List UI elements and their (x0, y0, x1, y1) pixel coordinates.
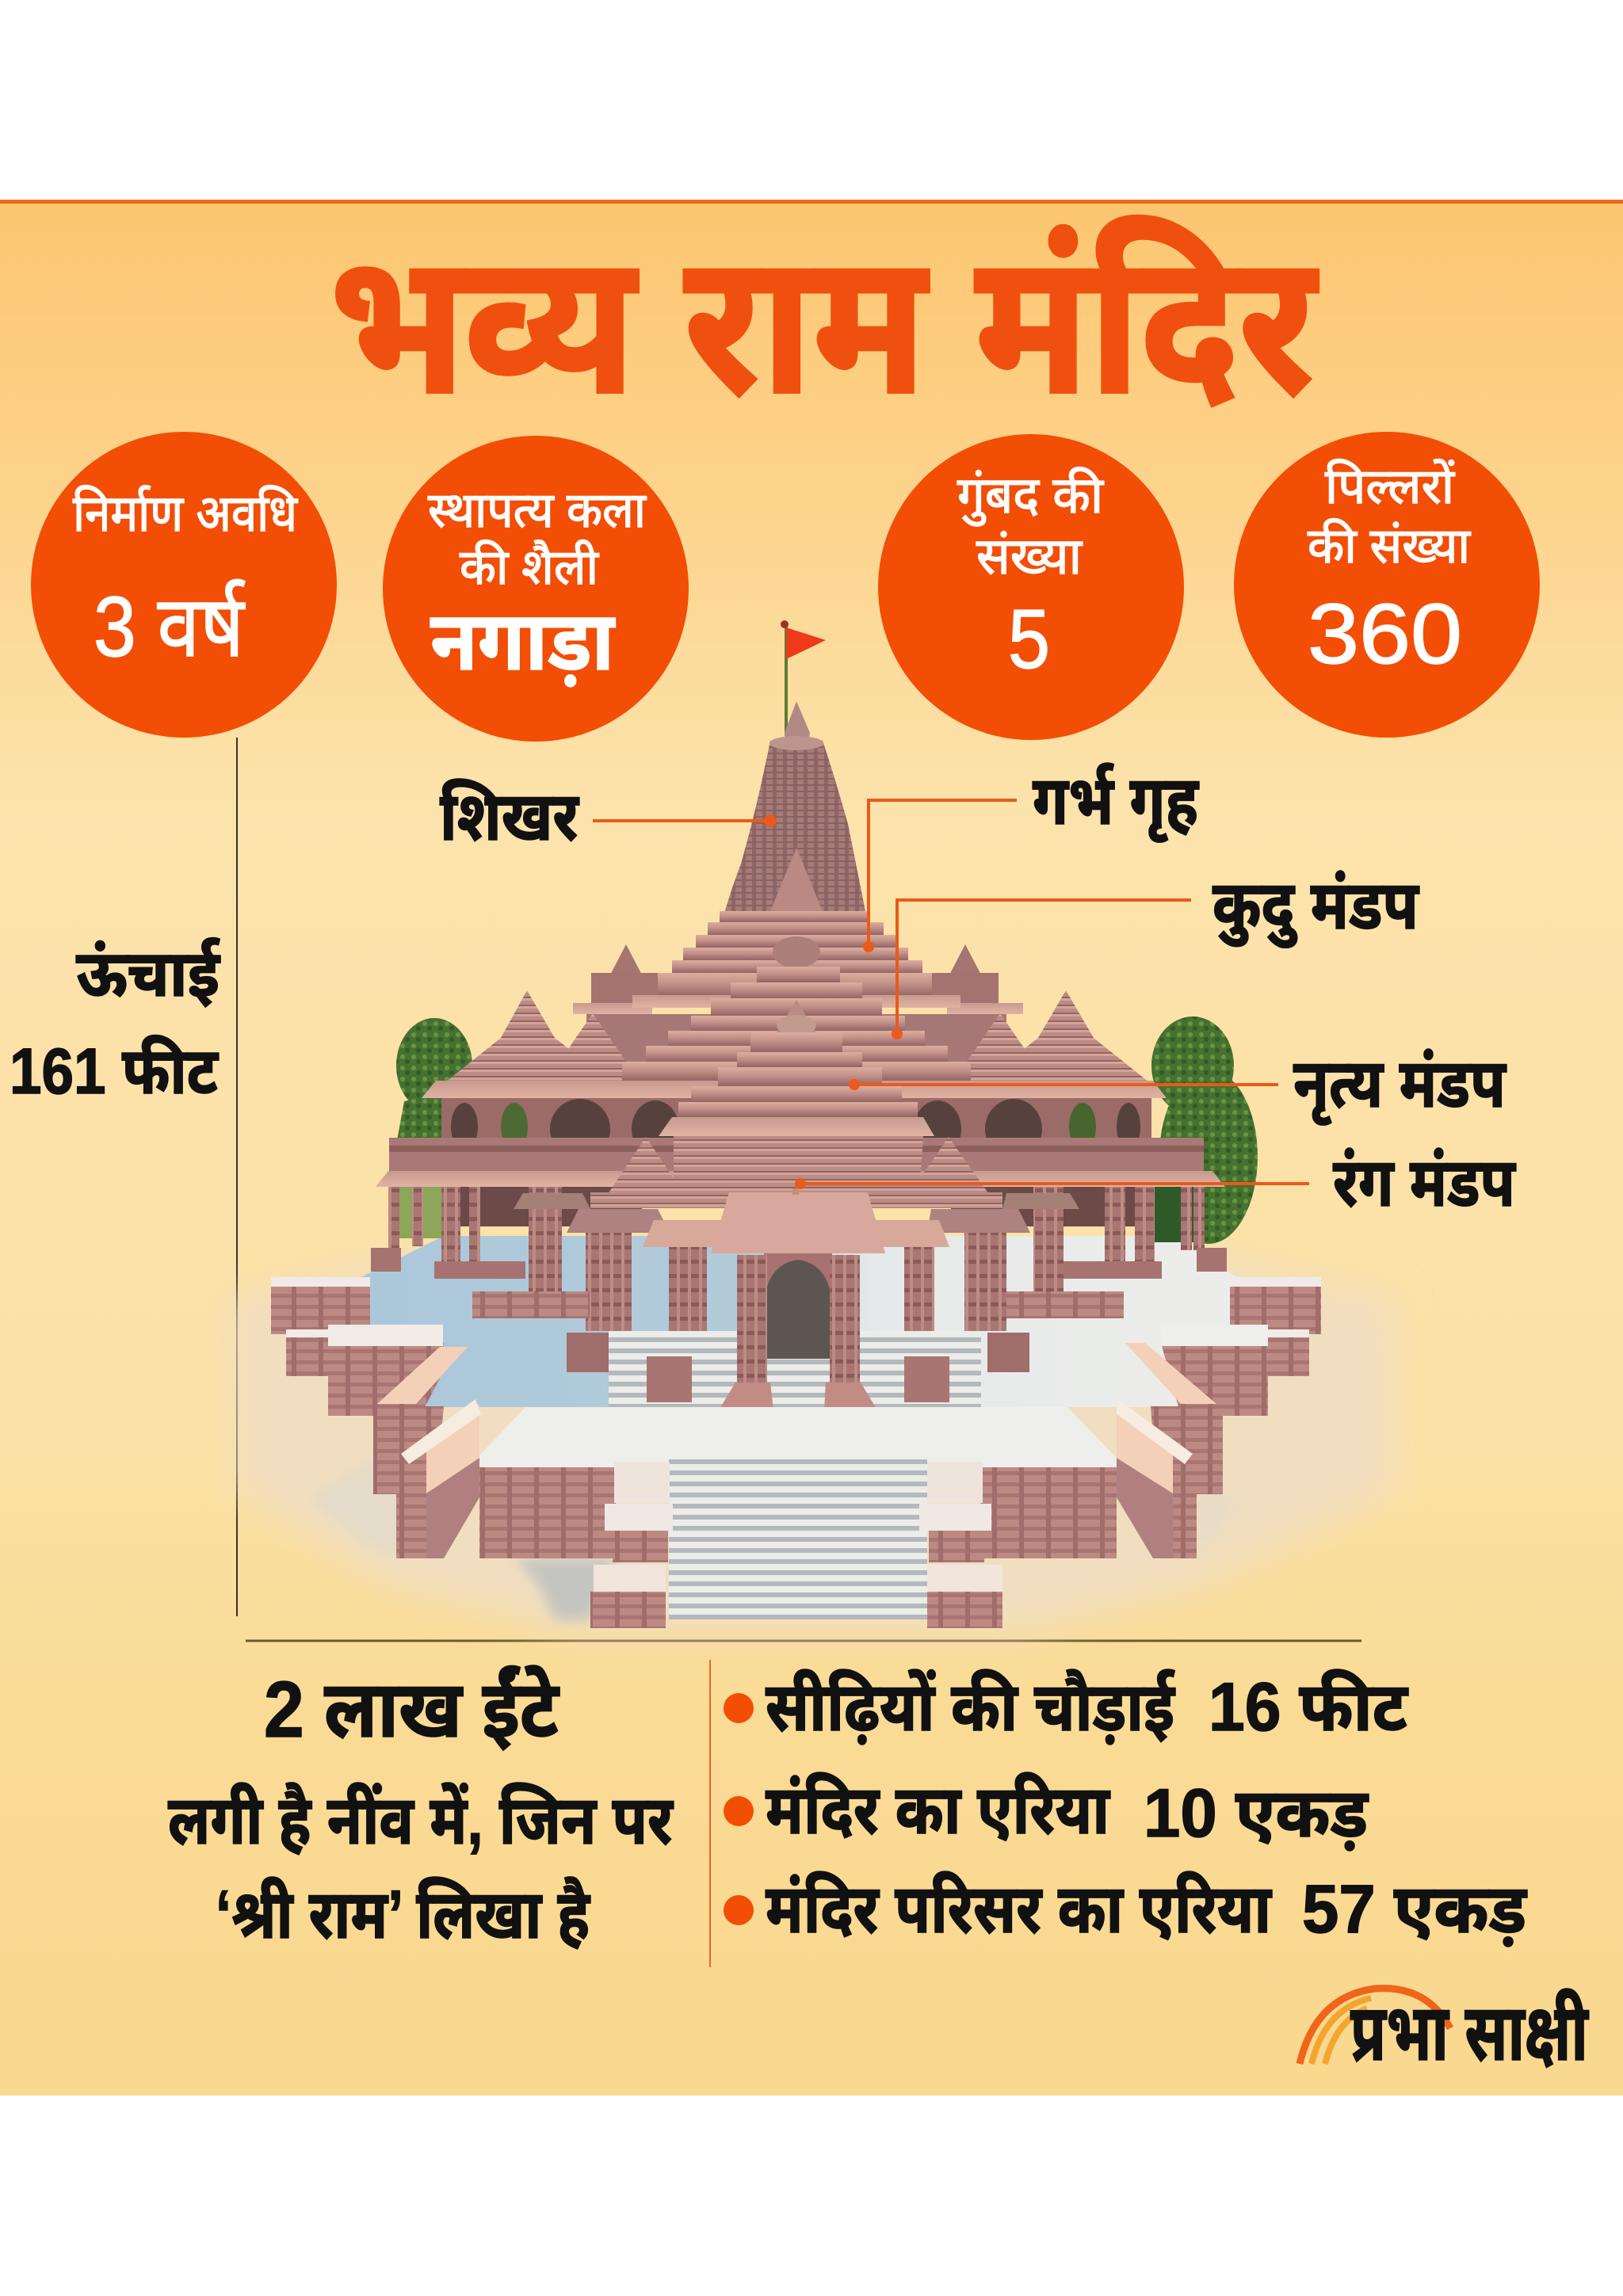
label: shikhar: शिखर (440, 778, 580, 855)
height axis lines (237, 738, 1361, 1641)
label: height: ऊंचाई (76, 937, 220, 1010)
front shrine pyramid (659, 1000, 934, 1136)
back side towers (573, 944, 1023, 1014)
label: nritya mandap (849, 1046, 1507, 1125)
middle stepped pyramid (622, 936, 971, 1081)
label: nritya mandap: नृत्य मंडप (1293, 1046, 1507, 1125)
label: garbh grih: गर्भ गृह (1033, 762, 1199, 842)
steps on floor (371, 1248, 1227, 1407)
label: shikhar (440, 778, 777, 855)
temple illustration (230, 620, 1395, 1632)
title: भव्य राम मंदिर (329, 214, 1319, 434)
stat circle: architecture style: की शैली (460, 539, 599, 595)
fact list: मंदिर का एरिया (766, 1772, 1110, 1848)
fact list: 16 फीट (1209, 1669, 1409, 1745)
label: garbh grih (863, 762, 1199, 952)
front walls (479, 1467, 1117, 1558)
column divider (709, 1660, 711, 1967)
stat circle: pillars (1234, 432, 1540, 738)
label: height: 161 फीट (10, 1035, 220, 1108)
fact list: 10 एकड़ (1144, 1775, 1369, 1852)
bricks text block: लगी है नींव में, जिन पर (168, 1782, 674, 1859)
stat circle: architecture style: स्थापत्य कला (428, 483, 647, 538)
stat circle: construction period: निर्माण अवधि (73, 485, 298, 542)
stat circle: domes: गुंबद की (957, 467, 1104, 526)
stat circle: pillars: की संख्या (1308, 518, 1471, 574)
fact list: सीढ़ियों की चौड़ाई (766, 1669, 1176, 1745)
floor (285, 1236, 1300, 1407)
back stepped tiers (655, 911, 940, 997)
upper hall (586, 995, 1006, 1085)
label: rang mandap: रंग मंडप (1333, 1145, 1517, 1221)
flag (781, 620, 826, 733)
stat circle: construction period: 3 वर्ष (94, 578, 246, 674)
bricks text block: 2 लाख ईंटे (264, 1665, 560, 1754)
front platform (479, 1407, 1117, 1474)
outer retaining walls (271, 1277, 1321, 1558)
grand staircase (669, 1459, 927, 1619)
stat circle: architecture style (383, 436, 689, 742)
stat circle: domes: संख्या (976, 528, 1083, 585)
front porch (711, 1188, 885, 1410)
wing eaves and arcade (376, 1081, 1225, 1187)
ground shadow (230, 1260, 1395, 1632)
cast shadows (309, 1442, 1236, 1620)
trees (388, 1016, 1258, 1244)
stat circle: pillars: पिल्लरों (1325, 459, 1455, 514)
stat circle: construction period (31, 432, 337, 738)
label: rang mandap (795, 1145, 1517, 1221)
stat circle: domes (878, 434, 1184, 740)
wing pyramids (445, 990, 1149, 1082)
stair side blocks (590, 1462, 1002, 1628)
fact list (724, 1669, 1528, 1947)
bricks text block (168, 1665, 674, 1953)
fact list: 57 एकड़ (1302, 1871, 1528, 1947)
lower colonnade (388, 1187, 1205, 1356)
shikhar tower (723, 701, 867, 919)
bricks text block: ‘श्री राम’ लिखा है (216, 1876, 590, 1953)
row of small shrines (590, 1136, 1002, 1208)
label: kudu mandap: कुदु मंडप (1212, 868, 1420, 948)
label: kudu mandap (892, 868, 1420, 1039)
stat circle: architecture style: नगाड़ा (430, 596, 616, 688)
stat circle: domes: 5 (1008, 593, 1050, 686)
label: height (10, 937, 220, 1108)
stat circle: pillars: 360 (1308, 585, 1462, 681)
fact list: मंदिर परिसर का एरिया (766, 1871, 1272, 1947)
